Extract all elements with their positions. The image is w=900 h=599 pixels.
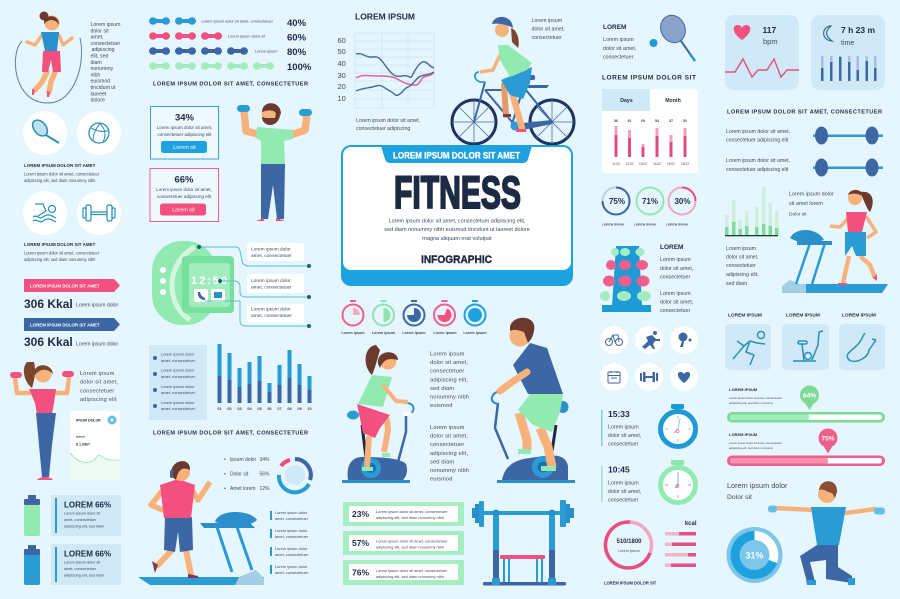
panel: bar chart legend: Lorem ipsum dolor xyxy=(161,368,195,372)
heading: days chart: LOREM IPSUM DOLOR SIT xyxy=(602,74,696,82)
chart: calorie ring xyxy=(605,522,652,568)
text: bike description one xyxy=(430,352,469,409)
text: barbell notes: Lorem ipsum dolor sit amet, xyxy=(726,158,790,164)
card: 34 percent: Lorem ipsum dolor sit amet, xyxy=(157,125,212,130)
chart: donut xyxy=(279,459,311,492)
text: racket block: dolor sit amet, xyxy=(603,46,636,52)
figure: weight bench xyxy=(472,500,574,586)
stat: 10:45 stopwatch text: Lorem ipsum xyxy=(608,480,639,486)
text: barbell notes: consectetuer adipiscing elit xyxy=(726,167,789,173)
icons: stopwatch percent row: Lorem ipsum xyxy=(372,331,396,335)
text: jump rope description: adipiscing xyxy=(92,47,115,53)
chart: line chart: 60 xyxy=(338,36,346,45)
heading: line chart title: LOREM IPSUM xyxy=(355,12,415,22)
chart: three progress rings: LOREM IPSUM xyxy=(634,222,656,226)
text: cycling note xyxy=(532,18,565,41)
list: percent rows xyxy=(343,502,464,585)
chart: days and month bars: 37 xyxy=(669,119,673,123)
banner: pink arrow with kcal: Lorem ipsum dolor xyxy=(76,302,118,308)
text: line chart note: Lorem ipsum dolor sit amet, xyxy=(356,118,420,124)
chart: dumbbell pictogram rows: Lorem ipsum dolor sit xyxy=(228,33,266,38)
text: bike description two: consectetuer xyxy=(430,442,464,448)
chart: green bars xyxy=(725,187,778,236)
text: cycling note: dolor sit amet, xyxy=(532,26,565,32)
text: dumbbell woman description: consectetuer xyxy=(80,388,114,394)
chart: kcal bars xyxy=(665,521,697,567)
text: racket and ball caption: adipiscing elit, sed diam nonummy nibh xyxy=(24,178,96,183)
text: racket and ball caption: Lorem ipsum dolor sit amet, consectetuer xyxy=(24,172,100,176)
text: racket block: consectetuer xyxy=(603,54,634,60)
ribbon: subtitle: LOREM IPSUM DOLOR SIT AMET xyxy=(393,150,520,160)
chart: dumbbell pictogram rows: Lorem ipsum dolor sit amet, consectetuer xyxy=(202,18,274,23)
figure: man lunging with dumbbells xyxy=(768,481,885,585)
panel: green bottle stat: Lorem ipsum dolor sit xyxy=(64,512,101,516)
text: treadmill woman note: Lorem ipsum dolor xyxy=(789,192,834,198)
text: jump rope description: nibh xyxy=(90,72,100,78)
list: treadmill notes xyxy=(270,510,309,575)
chart: dumbbell pictogram rows: 80% xyxy=(287,47,307,58)
text: lunge note xyxy=(727,481,788,501)
heading: right column caption: LOREM IPSUM DOLOR SIT AMET, CONSECTETUER xyxy=(727,110,882,116)
panel: blue bottle stat: amet, consectetuer xyxy=(64,567,97,571)
text: bike description one: sed diam xyxy=(430,386,454,392)
text: racket block xyxy=(603,24,636,60)
figure: woman with dumbbells xyxy=(10,362,74,480)
card: heart rate xyxy=(725,15,799,90)
banner: blue arrow with kcal: 306 Kkal xyxy=(24,335,73,349)
text: line chart note: consectetuer adipiscing xyxy=(356,126,410,132)
text: jump rope description: elit, sed xyxy=(90,54,108,60)
panel: bar chart legend: amet, consectetuer xyxy=(161,358,196,363)
progress: green bar with pin: 64% xyxy=(803,392,816,400)
icon: tennis racket and ball xyxy=(650,11,695,61)
card: mini line chart xyxy=(70,411,120,480)
chart: three progress rings: 30% xyxy=(674,197,691,206)
panel: skipping rope icon tile: LOREM IPSUM xyxy=(842,312,876,318)
text: dumbbell woman description: dolor sit amet, xyxy=(80,380,119,386)
card: 66 percent: Lorem ipsum dolor sit amet, xyxy=(156,187,212,192)
panel: blue bottle stat xyxy=(51,544,121,585)
text: rack notes: dolor sit amet, xyxy=(660,266,693,272)
text: dumbbell woman description: Lorem ipsum xyxy=(80,371,115,377)
banner: blue arrow with kcal: LOREM IPSUM DOLOR SIT AMET xyxy=(30,322,100,328)
card: mini line chart: IPSUM DOLOR xyxy=(76,418,101,422)
figure: dumbbell rack xyxy=(600,246,651,312)
panel: exercise bike icon tile: LOREM IPSUM xyxy=(786,312,820,318)
icons: stopwatch percent row xyxy=(341,300,487,335)
panel: blue bottle stat: LOREM 66% xyxy=(64,550,111,558)
list: percentages xyxy=(224,457,270,492)
progress: pink bar with pin xyxy=(727,428,885,466)
chart: days and month bars: 51 xyxy=(628,119,632,123)
card: 66 percent: consectetuer adipiscing elit xyxy=(157,194,212,199)
chart: line chart: 40 xyxy=(338,59,346,68)
callouts: smartwatch annotations: Lorem ipsum dolor xyxy=(251,278,291,284)
text: rack notes: dolor sit amet, xyxy=(660,300,693,306)
text: cycling note: consectetuer xyxy=(532,35,562,41)
chart: dumbbell pictogram rows xyxy=(149,17,312,73)
progress: pink bar with pin: adipiscing elit, sed diam nonummy xyxy=(729,446,774,450)
text: dumbbell woman description: adipiscing elit xyxy=(80,397,117,403)
panel: exercise bike icon tile xyxy=(782,312,829,370)
icons: stopwatch percent row: Lorem ipsum xyxy=(341,331,365,335)
text: jump rope description: laoreet xyxy=(90,91,107,97)
stat: 15:33 stopwatch text xyxy=(601,409,641,448)
chart: days and month bars: 13:02 xyxy=(639,162,647,166)
text: bike description two: euismod xyxy=(430,476,453,482)
text: green bars note: Lorem ipsum xyxy=(726,246,756,252)
chart: days and month bars: 11:02 xyxy=(612,162,620,166)
title: FITNESS: FITNESS xyxy=(394,167,521,218)
chart: line chart: 20 xyxy=(338,82,346,91)
text: bike description one: Lorem ipsum xyxy=(430,352,465,358)
banner: blue arrow with kcal xyxy=(24,318,120,349)
icon: tennis racket circle xyxy=(23,111,67,155)
chart: dumbbell pictogram rows: 40% xyxy=(287,18,307,29)
text: barbell notes xyxy=(726,129,790,173)
chart: days and month bars: 15:02 xyxy=(667,162,675,166)
chart: kcal bars: kcal xyxy=(685,521,697,527)
icons: six sport circles xyxy=(600,326,698,391)
icon: blue stopwatch xyxy=(660,404,696,446)
list: percent rows: adipiscing elit, sed diam nonummy nibh xyxy=(376,574,444,579)
figure: bearded man lifting dumbbells xyxy=(237,103,312,221)
list: percentages: Ipsum dolor xyxy=(230,457,256,463)
chart: stacked bars 01 to 10: 01 xyxy=(217,406,222,411)
panel: green bottle stat: amet, consectetuer xyxy=(64,518,97,522)
panel: bar chart legend: Lorem ipsum dolor xyxy=(161,352,195,356)
chart: line chart xyxy=(338,33,434,108)
icon: two barbells xyxy=(813,126,883,176)
text: jump rope description: amet, xyxy=(90,35,103,41)
icons: stopwatch percent row: Lorem ipsum xyxy=(463,331,487,335)
text: treadmill woman note: Dolor sit xyxy=(789,212,807,218)
banner: pink arrow with kcal: 306 Kkal xyxy=(24,297,73,311)
stat: 15:33 stopwatch text: 15:33 xyxy=(608,409,630,419)
card: mini line chart: Ipsum xyxy=(76,434,85,438)
list: percentages: Dolor sit xyxy=(230,472,249,478)
icon: blue water bottle xyxy=(24,545,40,585)
list: percent rows: Lorem ipsum dolor sit amet, consectetuer xyxy=(376,509,448,514)
card: sleep time xyxy=(811,15,885,90)
chart: line chart: 50 xyxy=(338,47,346,56)
stat: 15:33 stopwatch text: Lorem ipsum xyxy=(608,424,639,430)
text: rack notes: Lorem ipsum xyxy=(660,291,691,297)
stat: 10:45 stopwatch text xyxy=(601,464,641,504)
chart: stacked bars 01 to 10: 02 xyxy=(227,406,232,411)
chart: days and month bars: 56 xyxy=(614,119,618,123)
chart: three progress rings: 75% xyxy=(609,197,625,206)
list: percentages: 56% xyxy=(260,472,270,478)
figure: woman on treadmill xyxy=(782,190,888,293)
text: bike description two xyxy=(430,425,469,482)
text: jump rope description: Lorem ipsum xyxy=(90,22,120,28)
chart: days and month bars: 54 xyxy=(655,119,659,123)
text: green bars note: dolor sit amet, xyxy=(726,254,759,260)
chart: stacked bars 01 to 10: 06 xyxy=(267,406,272,411)
list: treadmill notes: Lorem ipsum dolor xyxy=(275,510,308,515)
list: percentages: 12% xyxy=(260,486,270,492)
panel: sprint icon tile: LOREM IPSUM xyxy=(728,312,762,318)
chart: days and month bars: 12:02 xyxy=(626,162,634,166)
text: line chart note xyxy=(356,118,420,132)
text: bike description one: euismod xyxy=(430,403,453,409)
progress: pink bar with pin: LOREM IPSUM xyxy=(729,432,758,437)
callouts: smartwatch annotations xyxy=(197,243,311,328)
text: green bars note xyxy=(726,246,759,287)
chart: days and month bars: 16:02 xyxy=(681,162,689,166)
figure: woman on exercise bike xyxy=(342,345,414,483)
chart: days and month bars xyxy=(602,89,698,173)
card: 66 percent: 66% xyxy=(174,174,194,186)
card: 34 percent: Lorem sit xyxy=(173,145,196,151)
banner: pink arrow with kcal: LOREM IPSUM DOLOR SIT AMET xyxy=(30,284,100,288)
chart: 31 percent donut xyxy=(726,527,782,583)
text: jump rope description: dolor sit xyxy=(90,28,109,34)
panel: sprint icon tile xyxy=(725,312,771,370)
text: cycling note: Lorem ipsum xyxy=(532,18,563,24)
text: bike description two: adipiscing elit, xyxy=(430,451,468,457)
text: bike description one: dolor sit amet, xyxy=(430,360,468,366)
chart: line chart: 30 xyxy=(338,71,346,80)
text: card description: Lorem ipsum dolor sit amet, consectetuer adipiscing elit, xyxy=(389,218,526,224)
chart: dumbbell pictogram rows: 60% xyxy=(287,32,307,44)
chart: stacked bars 01 to 10 xyxy=(217,344,312,411)
subtitle: INFOGRAPHIC: INFOGRAPHIC xyxy=(421,254,492,266)
progress: green bar with pin: Lorem ipsum dolor sit amet, consectetuer xyxy=(729,396,782,400)
text: rack notes: Lorem ipsum xyxy=(660,257,691,263)
stat: 10:45 stopwatch text: dolor sit amet, xyxy=(608,489,641,495)
chart: 31 percent donut: 31% xyxy=(745,550,764,560)
text: dumbbell woman description xyxy=(80,371,119,403)
icon: green stopwatch xyxy=(660,460,696,502)
list: treadmill notes: Lorem ipsum dolor xyxy=(275,528,308,533)
text: green bars note: consectetuer xyxy=(726,263,756,269)
chart: three progress rings xyxy=(602,188,696,226)
text: lunge note: Lorem ipsum dolor xyxy=(727,481,788,490)
list: percent rows: 76% xyxy=(352,568,369,578)
text: lunge note: Dolor sit xyxy=(727,494,752,501)
chart: three progress rings: LOREM IPSUM xyxy=(602,222,624,226)
text: jump rope description: diam xyxy=(90,60,102,66)
chart: calorie ring: 510/1800 xyxy=(616,539,642,545)
text: barbell notes: Lorem ipsum dolor sit amet, xyxy=(726,129,790,135)
ribbon: subtitle xyxy=(381,146,532,163)
list: treadmill notes: amet, consectetuer xyxy=(275,516,309,521)
text: bike description one: consectetuer xyxy=(430,369,464,375)
panel: bar chart legend: amet, consectetuer xyxy=(161,406,196,411)
figure: man on exercise bike xyxy=(492,318,575,483)
text: racket block: LOREM xyxy=(603,24,626,31)
text: racket block: Lorem ipsum xyxy=(603,37,634,43)
card: 66 percent xyxy=(150,168,218,222)
list: treadmill notes: amet, consectetuer xyxy=(275,534,309,539)
list: percent rows: 57% xyxy=(352,538,369,548)
panel: green bottle stat xyxy=(51,495,121,536)
panel: bar chart legend: amet, consectetuer xyxy=(161,390,196,395)
card: 34 percent: 34% xyxy=(175,112,195,124)
text: swim and weights caption: adipiscing elit, sed diam nonummy nibh xyxy=(24,257,96,262)
text: jump rope description: nonummy xyxy=(90,66,114,72)
list: treadmill notes: Lorem ipsum dolor xyxy=(275,546,308,551)
list: treadmill notes: amet, consectetuer xyxy=(275,570,309,575)
callouts: smartwatch annotations: Lorem ipsum dolor xyxy=(251,246,291,252)
panel: bar chart legend: Lorem ipsum dolor xyxy=(161,384,195,389)
text: racket and ball caption: LOREM IPSUM DOLOR SIT AMET xyxy=(24,163,96,168)
text: bike description two: nonummy nibh xyxy=(430,468,469,474)
chart: dumbbell pictogram rows: 100% xyxy=(287,62,312,73)
panel: skipping rope icon tile xyxy=(839,312,885,370)
list: treadmill notes: Lorem ipsum dolor xyxy=(275,564,308,569)
text: card description: sed diam nonummy nibh euismod tincidunt ut laoreet dolore xyxy=(384,227,530,233)
list: percent rows: Lorem ipsum dolor sit amet, consectetuer xyxy=(376,538,448,544)
text: swim and weights caption xyxy=(24,242,100,262)
panel: green bottle stat: LOREM 66% xyxy=(64,500,111,510)
chart: stacked bars 01 to 10: 10 xyxy=(307,406,312,411)
chart: days and month bars: Month xyxy=(665,98,681,104)
icon: dumbbell circle xyxy=(77,191,121,235)
banner: pink arrow with kcal xyxy=(24,279,120,311)
list: percent rows: adipiscing elit, sed diam nonummy nibh xyxy=(376,544,444,550)
panel: blue bottle stat: Lorem ipsum dolor sit xyxy=(64,560,101,564)
chart: days and month bars: 29 xyxy=(641,119,645,123)
card: 66 percent: Lorem sit xyxy=(172,208,195,214)
card: 34 percent xyxy=(150,106,218,159)
text: card description: magna aliquam erat volutpat xyxy=(422,236,492,242)
text: bike description one: adipiscing elit, xyxy=(430,377,468,383)
heading: bar chart caption: LOREM IPSUM DOLOR SIT AMET, CONSECTETUER xyxy=(153,430,308,436)
callouts: smartwatch annotations: Lorem ipsum dolor xyxy=(251,306,291,312)
card: heart rate: bpm xyxy=(763,37,778,46)
list: percent rows: Lorem ipsum dolor sit amet, consectetuer xyxy=(376,568,448,573)
figure: woman jumping rope xyxy=(15,12,82,103)
chart: line chart: 10 xyxy=(338,94,346,103)
chart: stacked bars 01 to 10: 09 xyxy=(297,406,302,411)
text: treadmill woman note: sit amet lorem xyxy=(789,201,823,207)
card: sleep time: 7 h 23 m xyxy=(841,25,875,35)
text: rack notes: consectetuer xyxy=(660,308,691,314)
text: green bars note: adipiscing elit, xyxy=(726,272,759,278)
list: percent rows: adipiscing elit, sed diam nonummy nibh xyxy=(376,515,444,520)
icon: swimmer circle xyxy=(23,191,67,235)
list: treadmill notes: amet, consectetuer xyxy=(275,552,309,557)
figure: woman cycling xyxy=(452,17,574,144)
panel: blue bottle stat: adipiscing elit, sed diam xyxy=(64,573,104,577)
chart: dumbbell pictogram rows: Lorem ipsum xyxy=(255,48,278,53)
chart: calorie ring: Lorem ipsum xyxy=(618,549,640,553)
progress: pink bar with pin: 75% xyxy=(821,436,835,442)
card: 34 percent: consectetuer adipiscing elit xyxy=(157,132,212,137)
icon: volleyball circle xyxy=(77,111,121,155)
chart: stacked bars 01 to 10: 07 xyxy=(277,406,282,411)
icons: stopwatch percent row: Lorem ipsum xyxy=(402,331,426,335)
stat: 15:33 stopwatch text: dolor sit amet, xyxy=(608,433,641,439)
callouts: smartwatch annotations: amet, consectetuer xyxy=(251,253,292,259)
progress: green bar with pin xyxy=(727,386,885,422)
banner: blue arrow with kcal: Lorem ipsum dolor xyxy=(76,342,118,348)
chart: three progress rings: 71% xyxy=(642,197,658,206)
panel: bar chart legend: Lorem ipsum dolor xyxy=(161,400,195,405)
panel: main title card xyxy=(341,145,573,286)
list: percent rows: 23% xyxy=(352,509,369,519)
card: mini line chart: $ 1,0867 xyxy=(76,442,90,446)
text: swim and weights caption: Lorem ipsum dolor sit amet, consectetuer xyxy=(24,250,100,256)
figure: man on treadmill xyxy=(138,461,264,585)
icon: green water bottle xyxy=(24,495,40,536)
stat: 10:45 stopwatch text: 10:45 xyxy=(608,464,630,474)
figure: smartwatch xyxy=(152,241,234,325)
text: bike description two: sed diam xyxy=(430,459,454,465)
chart: stacked bars 01 to 10: 08 xyxy=(287,406,292,411)
text: jump rope description: euismod xyxy=(90,79,110,85)
text: swim and weights caption: LOREM IPSUM DOLOR SIT AMET xyxy=(24,242,96,247)
progress: pink bar with pin: Lorem ipsum dolor sit amet, consectetuer xyxy=(729,441,782,445)
figure: smartwatch: 12:50 xyxy=(191,275,227,287)
chart: days and month bars: Days xyxy=(620,98,633,104)
list: percentages: Amet lorem xyxy=(230,486,256,492)
card: heart rate: 117 xyxy=(762,25,776,35)
chart: stacked bars 01 to 10: 03 xyxy=(237,406,242,411)
text: jump rope description: consectetuer xyxy=(90,41,120,47)
progress: green bar with pin: LOREM IPSUM xyxy=(729,387,758,392)
text: bike description two: Lorem ipsum xyxy=(430,425,465,431)
stat: 15:33 stopwatch text: consectetuer xyxy=(608,442,639,448)
callouts: smartwatch annotations: amet, consectetuer xyxy=(251,284,292,290)
chart: three progress rings: LOREM IPSUM xyxy=(666,222,688,226)
chart: days and month bars: 14:02 xyxy=(653,162,661,166)
text: green bars note: sed diam xyxy=(726,281,747,287)
heading: calorie caption: LOREM IPSUM DOLOR SIT xyxy=(604,580,657,586)
text: bike description one: nonummy nibh xyxy=(430,394,469,400)
text: jump rope description: dolore xyxy=(90,98,105,104)
text: racket and ball caption xyxy=(24,163,100,183)
card: sleep time: time xyxy=(841,40,854,47)
text: rack notes xyxy=(660,244,693,314)
chart: stacked bars 01 to 10: 04 xyxy=(247,406,252,411)
panel: bar chart legend: amet, consectetuer xyxy=(161,374,196,379)
text: rack notes: LOREM xyxy=(660,244,683,251)
chart: days and month bars: 52 xyxy=(683,119,687,123)
panel: bar chart legend xyxy=(149,345,207,420)
text: rack notes: consectetuer xyxy=(660,274,691,280)
text: treadmill woman note xyxy=(789,192,834,218)
text: bike description two: dolor sit amet, xyxy=(430,434,468,440)
text: barbell notes: consectetuer adipiscing elit xyxy=(726,138,789,144)
icons: stopwatch percent row: Lorem ipsum xyxy=(433,331,457,335)
list: percentages: • xyxy=(224,472,226,478)
text: jump rope description: tincidunt ut xyxy=(90,85,116,91)
text: jump rope description xyxy=(90,22,120,104)
list: percentages: • xyxy=(224,486,226,492)
list: percentages: • xyxy=(224,457,226,463)
text: card description xyxy=(384,218,530,242)
chart: stacked bars 01 to 10: 05 xyxy=(257,406,262,411)
callouts: smartwatch annotations: amet, consectetuer xyxy=(251,313,292,319)
list: percentages: 34% xyxy=(260,457,270,463)
progress: green bar with pin: adipiscing elit, sed diam nonummy xyxy=(729,401,774,405)
panel: green bottle stat: adipiscing elit, sed diam xyxy=(64,524,104,528)
heading: dumbbell chart caption: LOREM IPSUM DOLOR SIT AMET, CONSECTETUER xyxy=(153,82,308,88)
stat: 10:45 stopwatch text: consectetuer xyxy=(608,498,639,504)
